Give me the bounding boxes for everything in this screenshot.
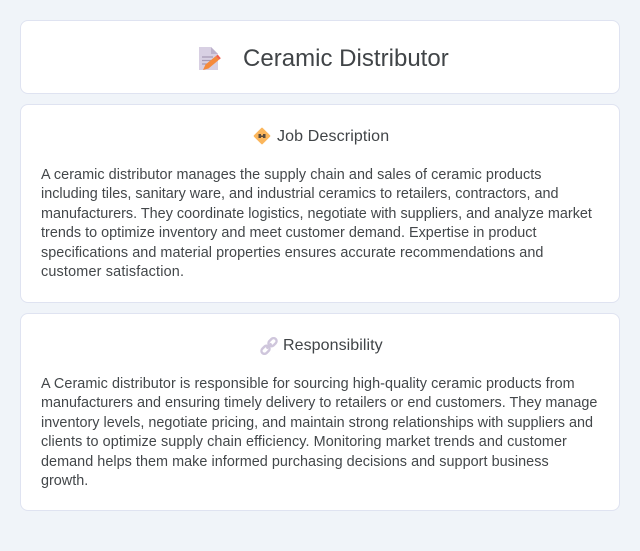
heading: responsibility: Responsibility — [283, 337, 383, 354]
text: job description: customer satisfaction. — [41, 264, 184, 280]
panel: responsibility — [20, 313, 620, 511]
text: responsibility: inventory levels, negotiate pricing, and maintain strong relationships with suppliers and — [41, 414, 593, 430]
text: responsibility: demand helps them make informed purchasing decisions and support business — [41, 454, 549, 470]
text: job description: trends to optimize inventory and meet customer demand. Expertise in product — [41, 225, 536, 241]
text: responsibility: clients to optimize supply chain efficiency. Monitoring market trends and customer — [41, 434, 567, 450]
heading: job description: Job Description — [277, 128, 389, 145]
text: job description: specifications and material properties ensures accurate recommendations and — [41, 244, 543, 260]
panel: title card — [20, 20, 620, 94]
text: job description — [41, 166, 592, 280]
text: responsibility — [41, 376, 597, 489]
text: responsibility: growth. — [41, 473, 88, 489]
text: responsibility: A Ceramic distributor is responsible for sourcing high-quality ceramic products from — [41, 376, 575, 392]
title: Ceramic Distributor — [243, 45, 449, 72]
text: job description: manufacturers. They coordinate logistics, negotiate with suppliers, and analyze market — [41, 206, 592, 222]
icon: chain link — [260, 337, 278, 355]
text: job description: A ceramic distributor manages the supply chain and sales of ceramic products — [41, 166, 542, 182]
text: responsibility: manufacturers and ensuring timely delivery to retailers or end customers. They manage — [41, 395, 597, 411]
icon: document with pencil — [199, 47, 221, 70]
text: job description: including tiles, sanitary ware, and industrial ceramics to retailers, contractors, and — [41, 186, 558, 202]
icon: job description diamond — [254, 128, 270, 144]
panel: job description — [20, 104, 620, 303]
